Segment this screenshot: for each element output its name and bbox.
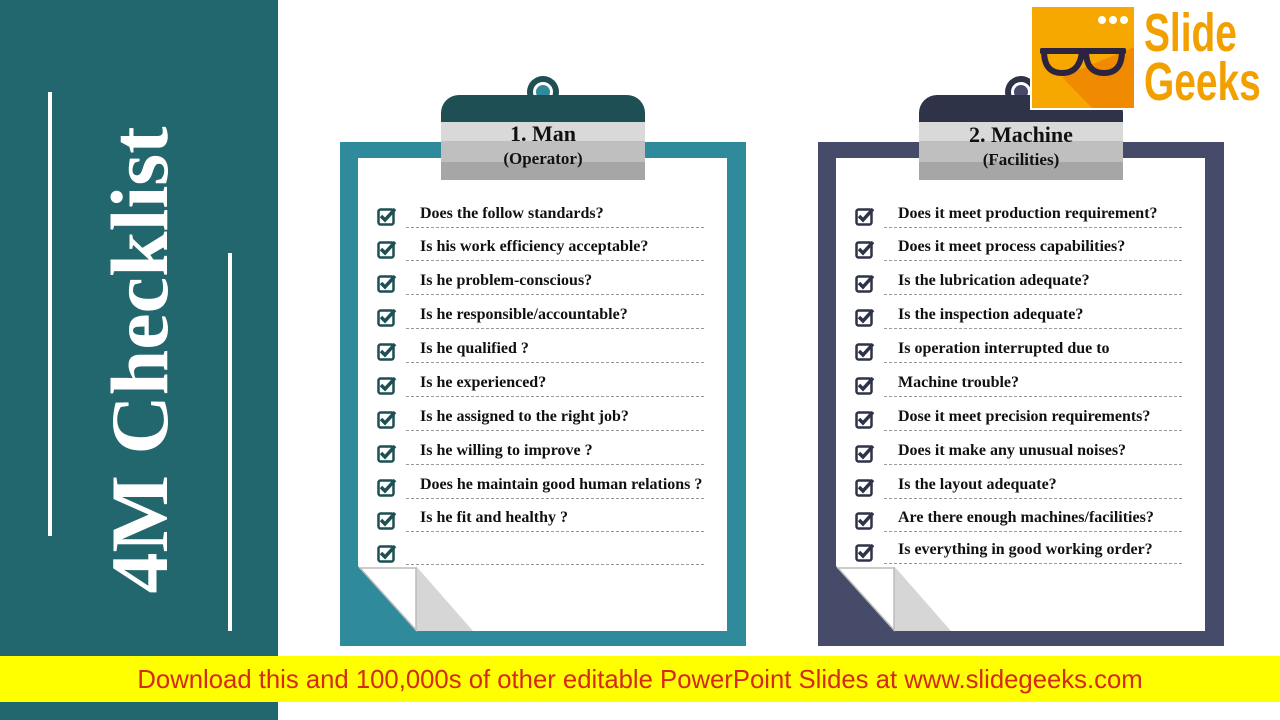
checklist items: Is he willing to improve ?: [420, 442, 593, 459]
checklist items: Is the layout adequate?: [898, 476, 1057, 493]
header tab: [919, 76, 1123, 180]
decorative line right: [228, 253, 232, 631]
logo: SlideGeeks: [1030, 5, 1260, 110]
footer banner: Download this and 100,000s of other editable PowerPoint Slides at www.slidegeeks.com: [137, 666, 1143, 694]
checklist items: Machine trouble?: [898, 374, 1019, 391]
header tab: (Operator): [503, 149, 583, 168]
checklist items: Is he responsible/accountable?: [420, 306, 628, 323]
heading: 1. Man: [510, 121, 576, 146]
checklist items: Is he fit and healthy ?: [420, 509, 568, 526]
checklist items: Does it meet process capabilities?: [898, 238, 1125, 255]
page fold corner: [836, 566, 951, 632]
logo text: [1144, 3, 1261, 112]
logo text: Slide: [1144, 3, 1237, 63]
checklist items: Is operation interrupted due to: [898, 340, 1110, 357]
left title panel: [0, 0, 278, 720]
checklist items: Does it make any unusual noises?: [898, 442, 1126, 459]
header tab: [441, 76, 645, 180]
checklist items: Dose it meet precision requirements?: [898, 408, 1150, 425]
title: 4M Checklist: 4M Checklist: [94, 127, 185, 593]
checklist items: [855, 205, 1182, 564]
checklist items: Is the lubrication adequate?: [898, 272, 1090, 289]
checklist items: Is his work efficiency acceptable?: [420, 238, 648, 255]
checklist items: Is the inspection adequate?: [898, 306, 1083, 323]
logo text: Geeks: [1144, 52, 1261, 112]
checklist items: Is he problem-conscious?: [420, 272, 592, 289]
checklist items: Does he maintain good human relations ?: [420, 476, 702, 493]
heading: 2. Machine: [969, 122, 1073, 147]
checklist items: [377, 205, 704, 565]
checklist items: Is he experienced?: [420, 374, 546, 391]
checklist items: Does the follow standards?: [420, 205, 604, 222]
decorative line left: [48, 92, 52, 536]
page fold corner: [358, 566, 473, 632]
checklist items: Is he assigned to the right job?: [420, 408, 629, 425]
icon: glasses: [1032, 7, 1134, 108]
header tab: (Facilities): [983, 150, 1059, 169]
checklist items: Is everything in good working order?: [898, 541, 1153, 558]
clipboard 2: Machine: [818, 76, 1224, 646]
checklist items: Does it meet production requirement?: [898, 205, 1158, 222]
clipboard 1: Man: [340, 76, 746, 646]
checklist items: Is he qualified ?: [420, 340, 529, 357]
footer banner: [0, 656, 1280, 702]
checklist items: Are there enough machines/facilities?: [898, 509, 1154, 526]
